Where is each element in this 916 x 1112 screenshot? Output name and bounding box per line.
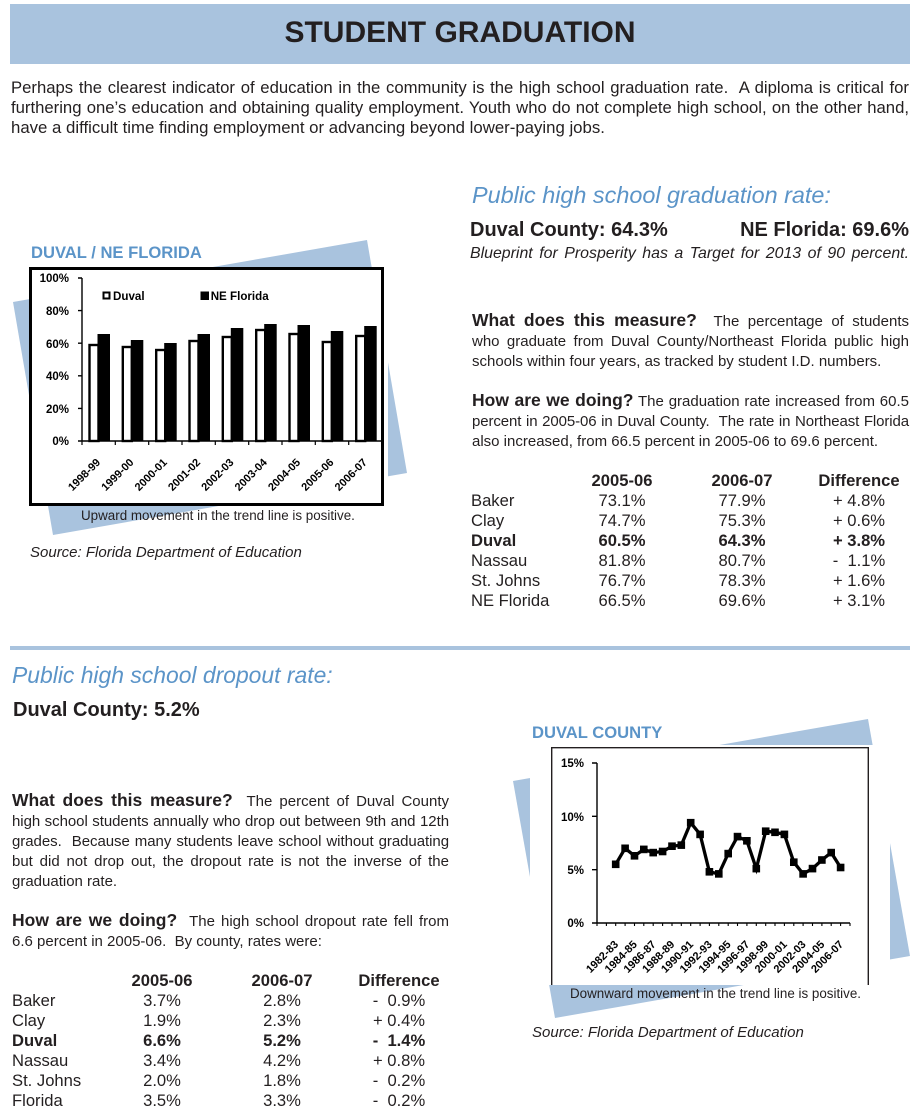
- dropout table: 3.4%: [143, 1051, 181, 1070]
- graduation table: 77.9%: [718, 491, 766, 510]
- dropout measure text: high school students annually who drop out between 9th and 12th: [12, 813, 449, 830]
- dropout table: 5.2%: [263, 1031, 301, 1050]
- graduation table: 64.3%: [718, 531, 766, 550]
- dropout table: + 0.4%: [373, 1011, 425, 1030]
- graduation table: 60.5%: [598, 531, 646, 550]
- graduation table: Nassau: [471, 551, 527, 570]
- graduation rate section: [470, 182, 910, 610]
- dropout line chart: 1986-87: [622, 939, 659, 976]
- dropout chart source: Source: Florida Department of Education: [532, 1024, 804, 1041]
- graduation chart background shape: [13, 240, 407, 535]
- dropout line chart: 1984-85: [603, 939, 640, 976]
- graduation table: + 3.1%: [833, 591, 885, 610]
- dropout chart background shape: [513, 719, 910, 1018]
- graduation bar chart: 2001-02: [166, 457, 203, 494]
- how are we doing: How are we doing? The graduation rate increased from 60.5: [472, 390, 909, 410]
- dropout line chart: [551, 747, 869, 985]
- dropout chart note: Downward movement in the trend line is positive.: [570, 986, 861, 1001]
- dropout table: Florida: [12, 1091, 63, 1110]
- dropout table: - 0.9%: [373, 991, 425, 1010]
- dropout table: 2.3%: [263, 1011, 301, 1030]
- dropout table: 2006-07: [252, 971, 312, 990]
- dropout chart heading: DUVAL COUNTY: [532, 723, 662, 742]
- dropout line chart: 15%: [561, 758, 584, 770]
- dropout line chart: 1982-83: [584, 939, 621, 976]
- dropout line chart: 10%: [561, 812, 584, 824]
- blueprint target: Blueprint for Prosperity has a Target for 2013 of 90 percent.: [470, 245, 909, 262]
- graduation bar chart: 60%: [46, 339, 69, 351]
- graduation table: 75.3%: [718, 511, 766, 530]
- dropout table: [12, 971, 440, 1110]
- graduation bar chart: [29, 267, 384, 506]
- graduation key figures: Duval County: 64.3%: [470, 219, 668, 241]
- dropout line chart: 2006-07: [809, 939, 846, 976]
- dropout how are we doing: [12, 910, 449, 950]
- graduation bar chart: 40%: [46, 371, 69, 383]
- graduation table: 80.7%: [718, 551, 766, 570]
- dropout table: Duval: [12, 1031, 57, 1050]
- dropout subheading: Public high school dropout rate:: [12, 662, 333, 688]
- graduation table: [471, 471, 900, 610]
- dropout measure text: but did not drop out, the dropout rate is not the inverse of the: [12, 853, 449, 870]
- dropout rate section: [12, 662, 449, 1110]
- graduation table: - 1.1%: [833, 551, 885, 570]
- dropout line chart: 1992-93: [678, 939, 715, 976]
- intro paragraph: furthering one’s education and obtaining quality employment. Youth who do not complete high school, on the other hand,: [11, 98, 909, 117]
- intro paragraph: have a difficult time finding employment or advancing beyond lower-paying jobs.: [11, 118, 605, 137]
- graduation table: 2005-06: [592, 471, 652, 490]
- dropout table: - 0.2%: [373, 1071, 425, 1090]
- graduation bar chart: 80%: [46, 306, 69, 318]
- dropout table: Nassau: [12, 1051, 68, 1070]
- graduation table: 81.8%: [598, 551, 646, 570]
- dropout measure text: graduation rate.: [12, 873, 117, 890]
- dropout how are we doing: 6.6 percent in 2005-06. By county, rates were:: [12, 933, 322, 950]
- dropout table: Clay: [12, 1011, 45, 1030]
- graduation bar chart: NE Florida: [211, 290, 269, 303]
- graduation table: Duval: [471, 531, 516, 550]
- graduation key figures: [470, 219, 909, 241]
- dropout table: - 1.4%: [373, 1031, 425, 1050]
- dropout table: St. Johns: [12, 1071, 81, 1090]
- graduation chart heading: DUVAL / NE FLORIDA: [31, 243, 202, 262]
- graduation table: Difference: [818, 471, 900, 490]
- how are we doing: also increased, from 66.5 percent in 2005-06 to 69.6 percent.: [472, 433, 878, 450]
- dropout measure text: What does this measure? The percent of Duval County: [12, 790, 449, 810]
- dropout table: + 0.8%: [373, 1051, 425, 1070]
- how are we doing: [472, 390, 910, 450]
- title banner: STUDENT GRADUATION: [284, 16, 636, 49]
- intro paragraph: [11, 78, 909, 137]
- graduation bar chart: 100%: [40, 273, 69, 285]
- graduation table: + 1.6%: [833, 571, 885, 590]
- dropout line chart: 1998-99: [734, 939, 771, 976]
- dropout table: Difference: [358, 971, 440, 990]
- graduation bar chart: 1998-99: [66, 457, 103, 494]
- graduation bar chart: 2006-07: [333, 457, 370, 494]
- dropout line chart: 2002-03: [772, 939, 809, 976]
- dropout measure text: grades. Because many students leave school without graduating: [12, 833, 449, 850]
- graduation table: + 3.8%: [833, 531, 885, 550]
- graduation table: 2006-07: [712, 471, 772, 490]
- what does this measure: who graduate from Duval County/Northeast Florida public high: [472, 333, 909, 350]
- graduation subheading: Public high school graduation rate:: [472, 182, 831, 208]
- dropout table: 4.2%: [263, 1051, 301, 1070]
- dropout key figure: Duval County: 5.2%: [13, 699, 200, 721]
- dropout table: Baker: [12, 991, 55, 1010]
- graduation table: 73.1%: [598, 491, 646, 510]
- what does this measure: [472, 310, 909, 370]
- graduation table: Clay: [471, 511, 504, 530]
- graduation table: + 0.6%: [833, 511, 885, 530]
- dropout table: 2005-06: [132, 971, 192, 990]
- dropout line chart: 1990-91: [659, 939, 696, 976]
- graduation table: 74.7%: [598, 511, 646, 530]
- intro paragraph: Perhaps the clearest indicator of education in the community is the high school graduation rate. A diploma is critical for: [11, 78, 909, 97]
- dropout table: 1.8%: [263, 1071, 301, 1090]
- what does this measure: What does this measure? The percentage of students: [472, 310, 909, 330]
- graduation table: Baker: [471, 491, 514, 510]
- dropout measure text: [12, 790, 449, 890]
- graduation table: 76.7%: [598, 571, 646, 590]
- dropout table: 6.6%: [143, 1031, 181, 1050]
- graduation bar chart: 1999-00: [99, 457, 136, 494]
- dropout line chart: 5%: [567, 865, 584, 877]
- dropout line chart: 1988-89: [640, 939, 677, 976]
- what does this measure: schools within four years, as tracked by student I.D. numbers.: [472, 353, 881, 370]
- graduation table: 66.5%: [598, 591, 646, 610]
- dropout line chart: 1996-97: [715, 939, 752, 976]
- dropout how are we doing: How are we doing? The high school dropout rate fell from: [12, 910, 449, 930]
- graduation bar chart: 2003-04: [233, 456, 270, 494]
- graduation chart panel: [13, 240, 407, 561]
- dropout table: 3.5%: [143, 1091, 181, 1110]
- graduation bar chart: 20%: [46, 404, 69, 416]
- graduation bar chart: 2002-03: [199, 457, 236, 494]
- graduation key figures: NE Florida: 69.6%: [740, 219, 909, 241]
- dropout table: - 0.2%: [373, 1091, 425, 1110]
- dropout line chart: 1994-95: [697, 939, 734, 976]
- graduation bar chart: 2005-06: [299, 457, 336, 494]
- graduation table: 69.6%: [718, 591, 766, 610]
- graduation table: St. Johns: [471, 571, 540, 590]
- graduation table: 78.3%: [718, 571, 766, 590]
- dropout line chart: 2000-01: [753, 939, 790, 976]
- dropout chart panel: [513, 719, 910, 1041]
- graduation bar chart: 2000-01: [133, 457, 170, 494]
- graduation table: + 4.8%: [833, 491, 885, 510]
- how are we doing: percent in 2005-06 in Duval County. The rate in Northeast Florida: [472, 413, 909, 430]
- dropout table: 2.0%: [143, 1071, 181, 1090]
- graduation chart source: Source: Florida Department of Education: [30, 544, 302, 561]
- graduation bar chart: 0%: [52, 436, 69, 448]
- divider: [10, 646, 910, 650]
- graduation chart note: Upward movement in the trend line is positive.: [81, 508, 355, 523]
- dropout line chart: 0%: [567, 918, 584, 930]
- dropout table: 2.8%: [263, 991, 301, 1010]
- dropout table: 3.3%: [263, 1091, 301, 1110]
- graduation bar chart: 2004-05: [266, 457, 303, 494]
- graduation bar chart: Duval: [113, 290, 145, 303]
- title banner: [10, 4, 910, 64]
- graduation table: NE Florida: [471, 591, 549, 610]
- dropout table: 1.9%: [143, 1011, 181, 1030]
- dropout table: 3.7%: [143, 991, 181, 1010]
- dropout line chart: 2004-05: [790, 939, 827, 976]
